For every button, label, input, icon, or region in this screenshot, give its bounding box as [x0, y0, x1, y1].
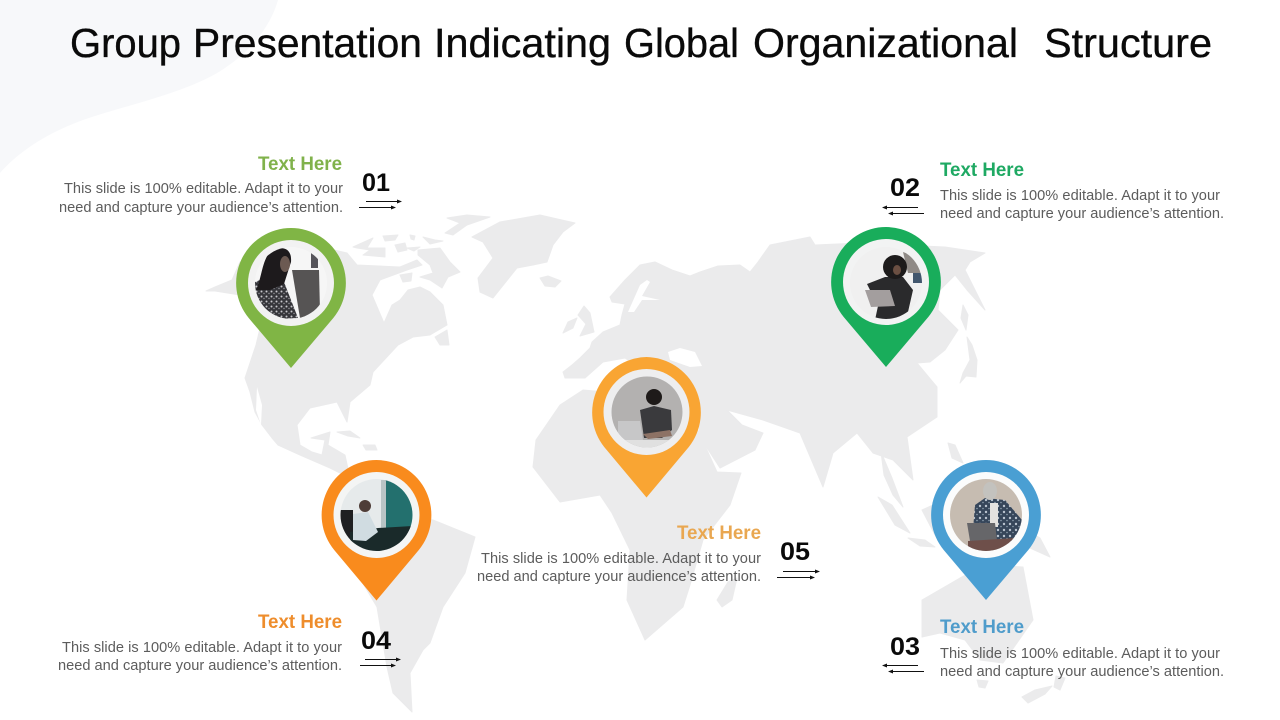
pin 02 marker: [831, 227, 941, 367]
body 05: This slide is 100% editable. Adapt it to your: [481, 551, 761, 567]
title: Structure: [1044, 20, 1212, 66]
pin 01 photo: [255, 248, 320, 318]
number 03: 03: [890, 633, 920, 661]
map: Newfoundland and Atlantic islands: [435, 276, 594, 345]
callout 03: text: [882, 617, 1224, 680]
map: Madagascar: [717, 578, 737, 607]
pin 01 ring: [248, 240, 334, 326]
map: Caribbean islands: [337, 431, 377, 450]
callout 02: text: [882, 160, 1224, 222]
heading 01: Text Here: [258, 154, 342, 175]
title: Group: [70, 20, 181, 66]
callout 05: amber pin: [592, 357, 701, 498]
arrows 01: [359, 200, 402, 210]
callout 02: text: need and capture your audience’s attention.: [940, 206, 1224, 222]
arrows 05: [777, 570, 820, 580]
callout 01: text: need and capture your audience’s attention.: [59, 200, 343, 216]
title: Organizational: [753, 20, 1018, 66]
callout 02: green pin: [831, 227, 941, 367]
pin 04 photo: [340, 479, 413, 551]
body 02: This slide is 100% editable. Adapt it to your: [940, 188, 1220, 204]
title: Global: [624, 20, 739, 66]
map: Tasmania and New Zealand: [977, 676, 1065, 703]
pin 04 ring: [334, 472, 420, 558]
map: Australia: [922, 565, 1033, 663]
callout 04: text: need and capture your audience’s attention.: [58, 658, 342, 674]
callout 01: green pin: [236, 228, 346, 368]
pin 02 ring: [843, 239, 929, 325]
pin 05 ring: [604, 369, 690, 455]
body 03: This slide is 100% editable. Adapt it to your: [940, 646, 1220, 662]
callout 04: text: [58, 612, 401, 674]
callout 03: text: need and capture your audience’s attention.: [940, 664, 1224, 680]
world map: [206, 215, 1065, 712]
body 04: This slide is 100% editable. Adapt it to your: [62, 640, 342, 656]
heading 03: Text Here: [940, 617, 1024, 638]
pin 02 photo: [865, 252, 922, 319]
heading 04: Text Here: [258, 612, 342, 633]
map: South America: [355, 515, 475, 712]
pin 01 marker: [236, 228, 346, 368]
background corner shape: [0, 0, 278, 173]
pin 04 marker: [322, 460, 431, 600]
number 01: 01: [362, 169, 390, 197]
pin 05 photo: [611, 376, 683, 448]
callout 05: text: [477, 523, 820, 585]
arrows 02: [882, 206, 924, 216]
callout 01: text: [59, 154, 402, 216]
map: Eurasia: [563, 237, 985, 487]
map: Africa: [533, 390, 741, 640]
callout 03: blue pin: [931, 460, 1041, 600]
callout 04: orange pin: [322, 460, 431, 600]
number 04: 04: [361, 627, 391, 655]
map: North America: [206, 240, 447, 478]
map: Greenland: [472, 215, 575, 298]
title: [70, 20, 1212, 66]
number 05: 05: [780, 538, 810, 566]
title: Presentation: [193, 20, 422, 66]
pin 05 marker: [592, 357, 701, 498]
arrows 03: [882, 664, 924, 674]
map: Black Sea and Baltic (water): [628, 280, 702, 367]
pin 03 ring: [943, 472, 1029, 558]
pin 03 photo: [950, 479, 1022, 552]
map: Canadian Arctic islands: [353, 215, 490, 288]
map: Asian islands: [878, 305, 1050, 557]
pin 03 marker: [931, 460, 1041, 600]
title: Indicating: [434, 20, 611, 66]
body 01: This slide is 100% editable. Adapt it to your: [64, 181, 343, 197]
number 02: 02: [890, 174, 920, 202]
heading 02: Text Here: [940, 160, 1024, 181]
heading 05: Text Here: [677, 523, 761, 544]
map: Baja California gulf (water): [256, 387, 262, 425]
arrows 04: [360, 658, 401, 668]
callout 05: text: need and capture your audience’s attention.: [477, 569, 761, 585]
